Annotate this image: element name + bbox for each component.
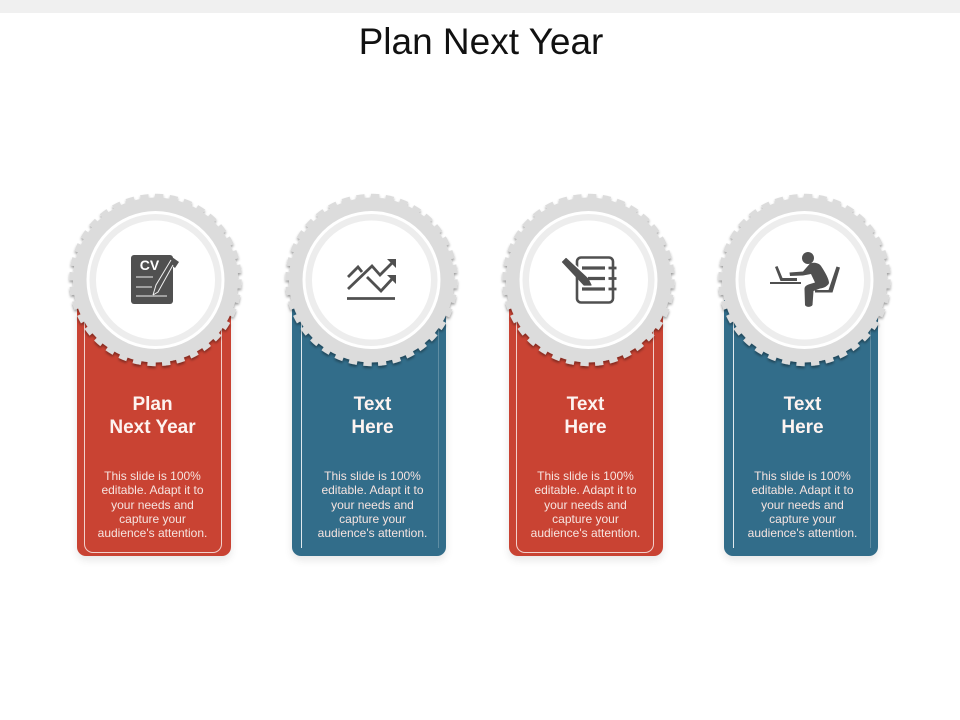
card 2 text: capture your	[339, 512, 406, 526]
card 1 text: This slide is 100%	[104, 469, 201, 483]
card 4 text: This slide is 100%	[754, 469, 851, 483]
card 4 background	[724, 300, 878, 556]
card 2 text: your needs and	[331, 498, 414, 512]
icon: trend arrows	[347, 259, 396, 298]
top bar	[0, 0, 960, 13]
card 3 text: editable. Adapt it to	[534, 483, 637, 497]
card 1 heading: Next Year	[109, 417, 196, 438]
gear 3	[504, 196, 672, 364]
card 2 heading: Text	[354, 394, 391, 415]
card 3 text: capture your	[552, 512, 619, 526]
card 2 text: editable. Adapt it to	[321, 483, 424, 497]
card 3 background	[509, 300, 663, 556]
card 2 background	[292, 300, 446, 556]
card 3 text: your needs and	[544, 498, 627, 512]
card 2 heading	[351, 394, 394, 438]
card 4 text: capture your	[769, 512, 836, 526]
card 4 heading	[781, 394, 824, 438]
card 4 heading: Here	[781, 417, 824, 438]
title: Plan Next Year	[359, 21, 603, 62]
card 2 heading: Here	[351, 417, 394, 438]
card 1 text: your needs and	[111, 498, 194, 512]
icon: notebook with pen	[562, 258, 616, 302]
card 3 text	[531, 469, 640, 540]
card 1 heading	[109, 394, 196, 438]
card 1 text: audience's attention.	[98, 526, 207, 540]
icon: person at laptop	[770, 252, 840, 307]
card 1 background	[77, 300, 231, 556]
icon: cv document: CV	[140, 257, 160, 273]
card 4 text: audience's attention.	[748, 526, 857, 540]
card 4 text	[748, 469, 857, 540]
card 4 text: your needs and	[761, 498, 844, 512]
card 4 heading: Text	[784, 394, 821, 415]
icon: cv document	[131, 255, 179, 304]
card 1 text: editable. Adapt it to	[101, 483, 204, 497]
card 2 text: audience's attention.	[318, 526, 427, 540]
gear 1	[72, 196, 240, 364]
card 3 text: audience's attention.	[531, 526, 640, 540]
card 1 heading: Plan	[132, 394, 173, 415]
card 3 heading	[564, 394, 607, 438]
card 1 text	[98, 469, 207, 540]
gear 2	[288, 196, 456, 364]
card 4 text: editable. Adapt it to	[751, 483, 854, 497]
card 3 heading: Here	[564, 417, 607, 438]
card 1 text: capture your	[119, 512, 186, 526]
card 3 text: This slide is 100%	[537, 469, 634, 483]
card 2 text	[318, 469, 427, 540]
card 2 text: This slide is 100%	[324, 469, 421, 483]
gear 4	[720, 196, 888, 364]
card 3 heading: Text	[567, 394, 604, 415]
